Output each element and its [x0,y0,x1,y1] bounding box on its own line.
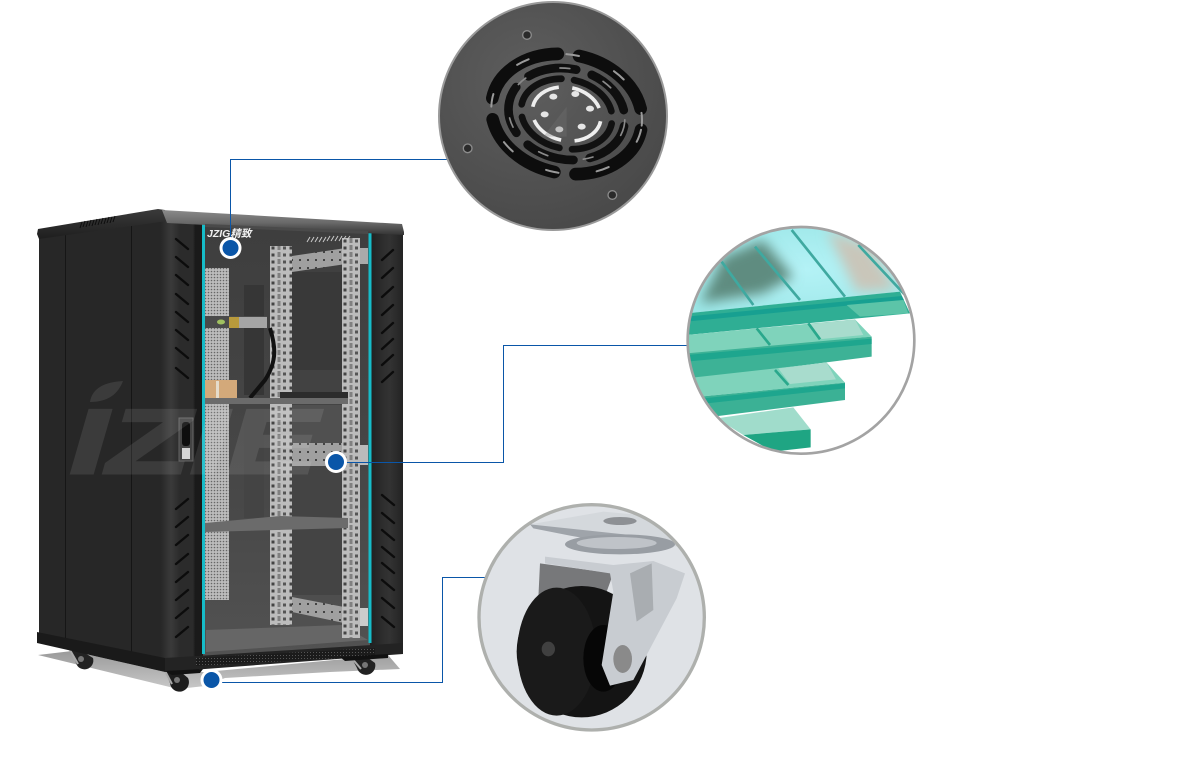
rear panel [292,272,342,370]
axle [613,645,632,673]
cabinet [37,209,404,692]
interior floor [206,625,368,652]
top lid [162,210,404,235]
door handle [179,418,193,461]
side panel [39,218,165,660]
door top bar [205,224,368,234]
front left frame [160,220,204,660]
left rail [270,246,292,625]
swivel disc [565,534,675,554]
callout circle: tempered glass [687,227,920,454]
right rail [342,238,360,638]
rear hole columns [244,285,264,395]
watermark: IZIE [70,392,321,493]
marker: fan [220,237,242,259]
side roof [37,209,167,239]
hub holes [541,91,594,132]
leader line: caster [211,578,487,682]
marker: glass [325,451,347,473]
leader line: glass [336,346,688,462]
fork [545,557,685,686]
casters [70,650,375,692]
screws [463,31,617,199]
side roof vent [80,216,115,228]
cross bars [290,248,368,626]
glass door interior [203,224,370,657]
third sheet [687,363,845,397]
second sheet [687,319,872,355]
left door vents [176,239,188,637]
glass sheet edges [687,292,910,335]
wheel [517,586,647,717]
fan grille [486,48,648,180]
right door vents [382,250,394,627]
upper shelf [205,392,348,404]
PDU [205,316,274,398]
lower shelf [205,516,348,532]
base [37,632,403,675]
hub white arcs [531,85,602,143]
inner fork shadow [538,563,611,595]
blade highlights [490,53,643,174]
watermark mark [543,107,567,137]
perforated door strip [205,268,229,600]
leader line: fan [230,160,447,245]
front right frame [369,230,403,650]
marker: caster [200,669,222,691]
callout circle: fan [439,2,667,230]
fourth sheet [717,407,811,435]
mounting plate [530,512,677,547]
infographic canvas [37,1,916,732]
brand logo: JZIG精致 [207,228,253,240]
watermark [70,381,321,493]
callout circle: caster wheel [479,505,704,730]
cardboard box [205,380,237,400]
top glass pane [692,228,900,313]
door vent marks [307,236,350,242]
cyan glass edges [202,223,205,654]
floor shadow [38,651,400,689]
